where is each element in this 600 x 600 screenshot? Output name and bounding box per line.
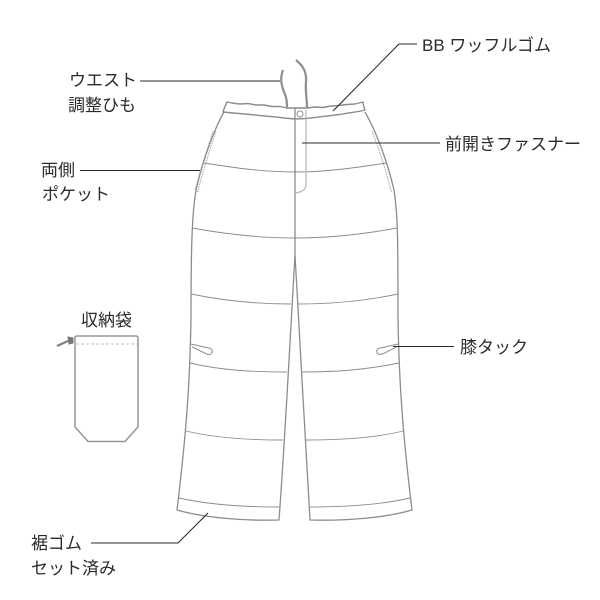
snap button: [297, 111, 303, 117]
bag toggle: [68, 337, 73, 344]
label: hem rubber line 2: セット済み: [31, 559, 116, 578]
label: knee tuck: 膝タック: [460, 338, 528, 357]
left pocket: [195, 131, 216, 192]
drawstring right: [296, 60, 307, 108]
pants illustration: [177, 60, 412, 520]
bag cord: [57, 341, 68, 346]
label: hem rubber: 裾ゴム: [31, 533, 82, 553]
left leg outline: [177, 108, 295, 520]
storage bag: [57, 336, 138, 442]
label: front zipper: 前開きファスナー: [445, 135, 581, 154]
left knee tuck: [191, 344, 212, 354]
quilting seams: [204, 163, 386, 172]
right knee tuck: [377, 344, 398, 354]
leader lines: [80, 44, 454, 543]
label: pockets: 両側: [41, 161, 75, 180]
waistband: [223, 102, 365, 119]
bag outline: [75, 336, 138, 442]
fly placket: [295, 110, 306, 193]
bag drawcord line: [76, 343, 138, 345]
label: BB waffle rubber: BB ワッフルゴム: [422, 35, 551, 55]
drawstring left: [281, 70, 287, 108]
right leg outline: [295, 112, 412, 520]
label: waist cord line 2: 調整ひも: [68, 96, 136, 115]
label: storage bag: 収納袋: [81, 311, 132, 330]
label: pockets line 2: ポケット: [42, 185, 110, 204]
label: waist cord: ウエスト: [69, 71, 137, 90]
right pocket: [372, 131, 394, 192]
